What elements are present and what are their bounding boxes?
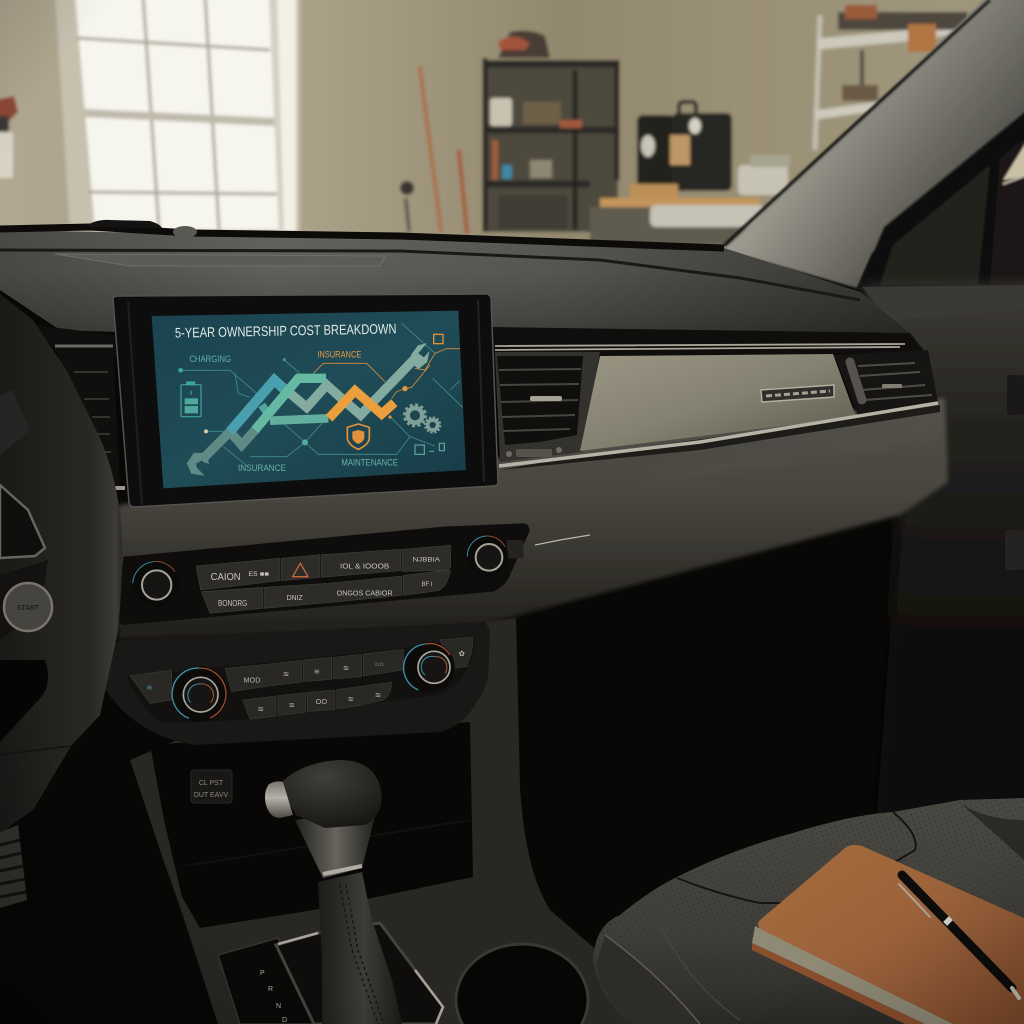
green line [255, 378, 326, 430]
steering wheel [0, 294, 122, 833]
gear boot surround [276, 923, 443, 1024]
climate button labels: MOD [243, 676, 261, 685]
gear shifter [265, 760, 402, 1024]
radio control panel [118, 523, 529, 625]
climate buttons [130, 637, 473, 719]
circuit lines orange [313, 349, 460, 398]
label: insurance orange: INSURANCE [317, 349, 361, 359]
dash recess band [35, 325, 925, 360]
chrome trim bottom [499, 403, 938, 466]
toolboxes [637, 102, 732, 191]
climate button labels: ≋ [283, 670, 289, 679]
upper dashboard [0, 230, 912, 345]
label: maintenance: MAINTENANCE [341, 457, 398, 467]
orange line [329, 391, 394, 418]
start button [4, 583, 52, 631]
small switch panel: CL PST [199, 780, 224, 787]
circuit nodes [178, 358, 408, 445]
title: 5-YEAR OWNERSHIP COST BREAKDOWN [175, 320, 397, 341]
wrench head lower [187, 453, 208, 475]
garage background [0, 0, 1024, 252]
tray ribs [185, 820, 470, 866]
start button: START [17, 605, 40, 612]
left air vent [55, 345, 125, 490]
screen [152, 311, 466, 488]
radio buttons [196, 545, 451, 613]
radio button labels: BF I [422, 581, 432, 588]
side window and door frame [857, 108, 1024, 290]
radio button labels: ONGOS CABIOR [337, 590, 393, 597]
climate button labels: ≋ [146, 683, 152, 692]
radio button labels: BONORG [218, 599, 247, 608]
door upper edge [862, 285, 1024, 320]
wrench line chart [202, 355, 418, 460]
climate button labels: ≋ [258, 705, 264, 714]
label: charging: CHARGING [189, 354, 231, 364]
gear selector keypad: N [276, 1003, 281, 1010]
defrost vent strip [55, 254, 385, 266]
door pull details [1005, 375, 1024, 570]
wall item at left [0, 96, 18, 178]
glove box panel [500, 354, 940, 470]
pedal [0, 825, 27, 908]
icon: gears [404, 405, 440, 433]
workbench [590, 155, 790, 245]
blue line [230, 355, 418, 432]
climate button labels: ≋ [343, 664, 349, 673]
dash crease line [0, 250, 860, 300]
left climate dial [172, 666, 228, 722]
right radio knob [467, 535, 523, 577]
A-pillar [724, 0, 1024, 288]
icon: teal square [415, 443, 444, 454]
icon: battery [181, 382, 201, 417]
wiper cowl and sensor [85, 220, 197, 238]
climate button labels: ○○ [375, 660, 384, 669]
label: insurance teal: INSURANCE [238, 463, 286, 473]
radio button labels: IOL & IOOOB [340, 564, 390, 571]
gear selector keypad: R [268, 986, 273, 993]
icon: hazard triangle [293, 563, 308, 577]
radio button labels: E5 ■■ [248, 571, 269, 578]
climate button labels: ≋ [375, 690, 381, 699]
gear selector keypad: P [260, 970, 265, 977]
small switch panel: DUT EAVV [194, 792, 229, 799]
garage window [55, 0, 300, 232]
left radio knob [133, 561, 179, 607]
climate control panel [127, 637, 474, 723]
climate button labels: ≋ [348, 695, 354, 704]
metal shelving [484, 31, 619, 232]
notebook [752, 845, 1024, 1024]
climate button labels: ✿ [459, 649, 465, 658]
centre air vent [495, 352, 600, 462]
passenger seat [593, 798, 1024, 1024]
icon: shield [347, 424, 369, 449]
console lower recess [150, 722, 473, 928]
climate button labels: OO [316, 697, 327, 706]
chrome trim top [495, 344, 905, 350]
climate button labels: ≋ [289, 700, 295, 709]
console body [130, 618, 665, 1024]
long-handled tools [400, 68, 467, 232]
pen [899, 875, 1019, 998]
radio button labels: CAION [211, 572, 241, 583]
wrench head upper [412, 344, 428, 368]
right air vent [834, 350, 938, 416]
radio button labels: DNIZ [287, 595, 303, 602]
radio button labels [211, 556, 441, 608]
icon: orange square [434, 334, 443, 344]
right shelving [815, 5, 968, 150]
small switch panel [191, 770, 232, 803]
radio button labels: NJBBIA [413, 556, 441, 563]
cup holder [456, 944, 588, 1024]
climate button labels: ≋ [314, 667, 320, 676]
windshield base seal [0, 227, 724, 248]
grey handle [202, 428, 257, 460]
dash scratch [535, 535, 590, 545]
gear selector keypad: D [282, 1017, 287, 1024]
climate button labels [146, 649, 465, 714]
door panel [860, 285, 1024, 1024]
touchscreen unit [113, 294, 498, 507]
badge [761, 385, 834, 402]
centre dashboard body [118, 398, 948, 640]
circuit lines [181, 323, 463, 468]
right climate dial [404, 642, 455, 693]
lower dash bezel [100, 622, 490, 745]
gear selector keypad [218, 938, 316, 1024]
